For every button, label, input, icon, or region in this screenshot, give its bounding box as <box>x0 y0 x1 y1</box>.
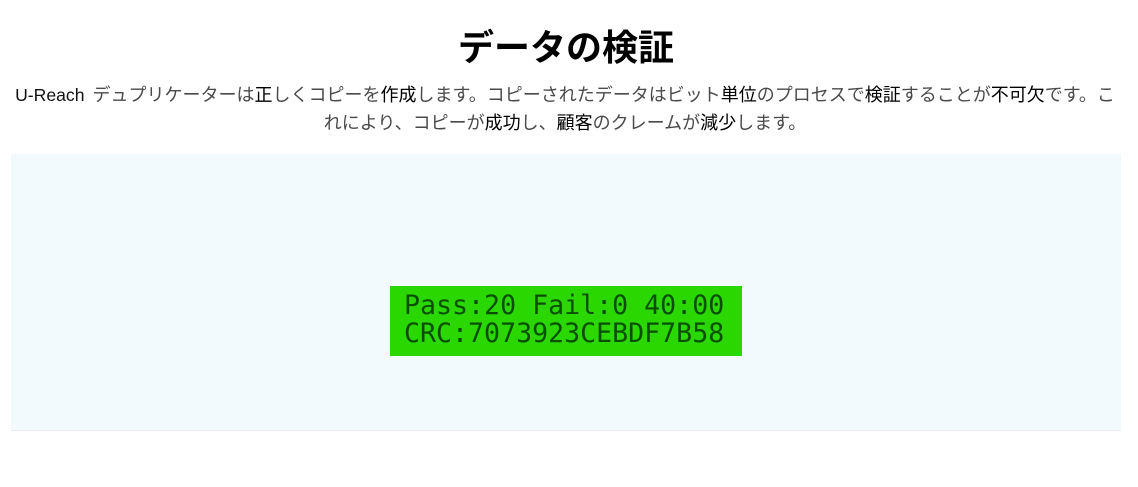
description text: U-Reach デュプリケーターは正しくコピーを作成します。コピーされたデータはビット単位のプロセスで検証することが不可欠です。こ <box>15 85 1115 105</box>
LCD screen: Pass:20 Fail:0 40:00 CRC:7073923CEBDF7B58 <box>404 290 724 349</box>
panel: verification display <box>11 154 1121 431</box>
description text: れにより、コピーが成功し、顧客のクレームが減少します。 <box>324 113 806 133</box>
description text <box>15 85 1115 133</box>
title: データの検証 <box>458 27 674 68</box>
